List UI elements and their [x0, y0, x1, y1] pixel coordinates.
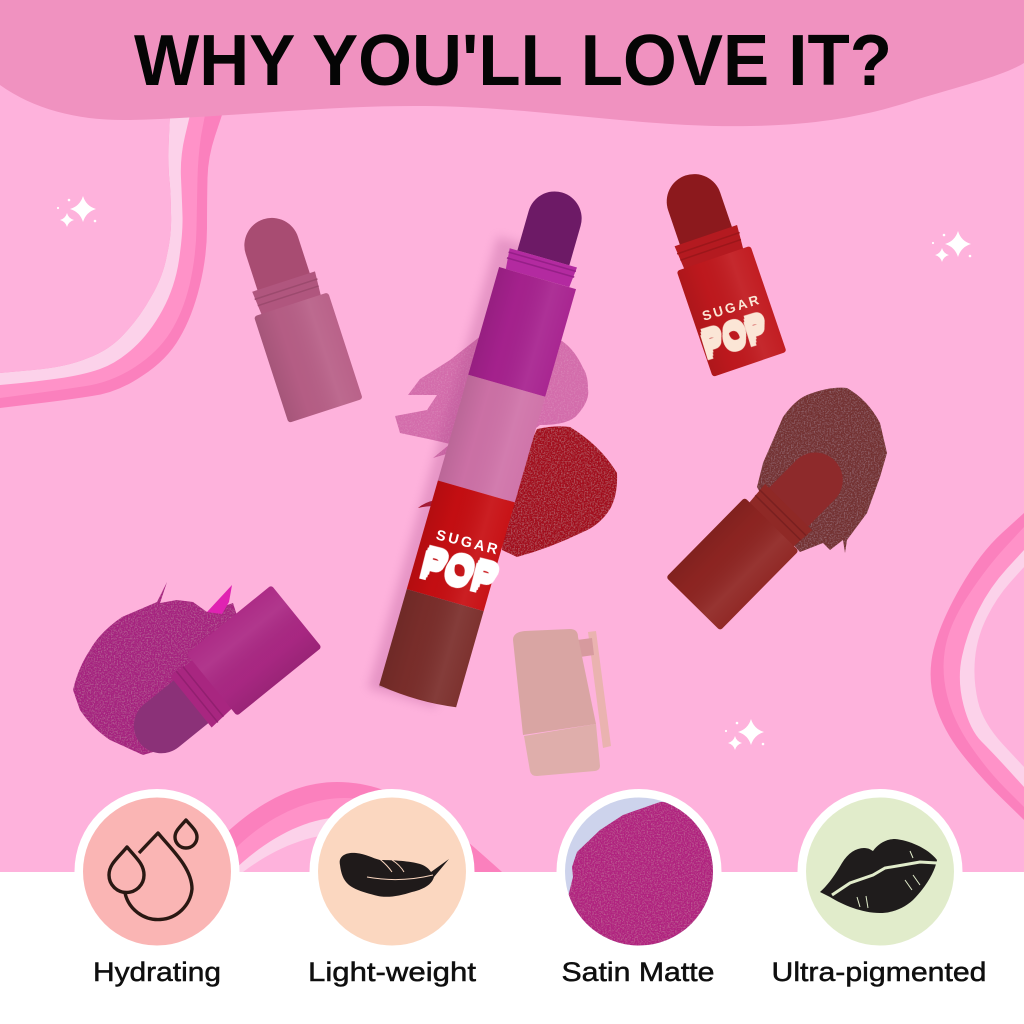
- lipstick: dusty pink mini: [226, 207, 363, 423]
- icon: lips: [820, 839, 937, 913]
- badge: satin matte: [556, 789, 722, 946]
- decorative wave: left: [0, 115, 222, 408]
- lipstick: red mini with logo: [648, 163, 787, 377]
- lipstick: purple mini: [115, 585, 322, 774]
- header banner: [0, 0, 1024, 126]
- swatch: brown smear: [757, 388, 887, 553]
- sparkle: centre right: [725, 719, 764, 750]
- label: hydrating: Hydrating: [93, 957, 221, 987]
- icon: water drops: [109, 820, 197, 920]
- title: WHY YOU'LL LOVE IT?: [134, 21, 892, 101]
- badge: light-weight: [310, 789, 474, 954]
- swatch: purple smear: [73, 582, 240, 755]
- sparkle: top right: [932, 231, 971, 262]
- swatch: magenta texture: [568, 802, 713, 946]
- brand logo on red mini: SUGAR: [700, 292, 763, 324]
- badge: hydrating: [74, 789, 240, 954]
- brand logo on red mini: POP: [697, 305, 772, 361]
- label: light-weight: Light-weight: [308, 957, 477, 987]
- lipstick cap: [513, 629, 611, 776]
- label: satin matte: Satin Matte: [562, 957, 714, 987]
- icon: feather: [340, 853, 449, 897]
- white footer band: [0, 872, 1024, 1024]
- sparkle: top left: [57, 196, 96, 227]
- decorative wave: right: [931, 513, 1024, 820]
- brand logo on main pencil: SUGAR: [434, 527, 502, 559]
- lipstick: main four-colour pencil: [368, 179, 601, 713]
- swatch: pink smear: [395, 335, 588, 458]
- lipstick: brown mini: [666, 434, 862, 631]
- swatch: red smear: [418, 426, 617, 557]
- label: ultra-pigmented: Ultra-pigmented: [772, 957, 986, 987]
- decorative arch behind badges: [228, 782, 502, 872]
- badge: ultra-pigmented: [798, 789, 962, 954]
- brand logo on main pencil: POP: [419, 538, 503, 599]
